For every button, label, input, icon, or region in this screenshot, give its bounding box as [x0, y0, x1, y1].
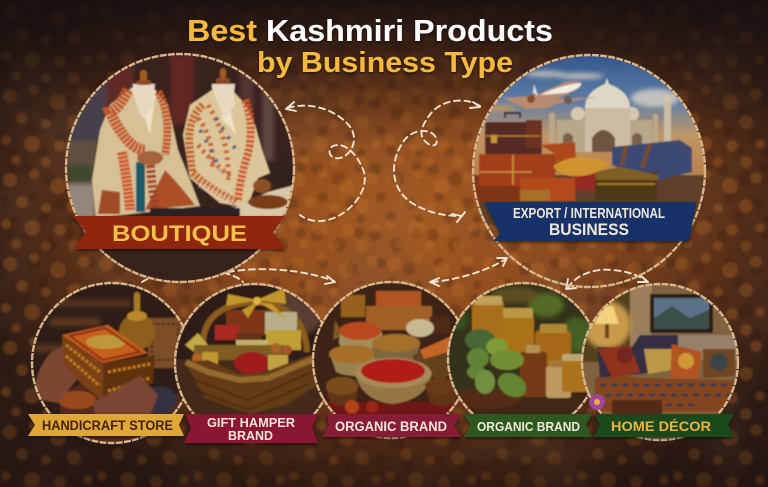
circle border — [313, 282, 469, 438]
arrow: centre connector — [430, 258, 507, 286]
ribbon: organic brand red: ORGANIC BRAND — [335, 419, 447, 434]
panel: organic brand spices — [312, 280, 460, 440]
circle border — [582, 284, 738, 440]
suitcases — [485, 122, 542, 155]
image: luggage and palace — [470, 50, 710, 225]
circle border — [175, 284, 333, 442]
title: Best Kashmiri Products — [187, 13, 553, 48]
circle border — [66, 54, 294, 282]
image: carved box — [34, 284, 184, 442]
image: sofa and cushions — [580, 282, 740, 442]
left shawl — [92, 88, 200, 218]
ribbon: gift hamper brand: GIFT HAMPER — [207, 415, 296, 430]
image: gift basket — [176, 285, 324, 414]
ribbon: export: EXPORT / INTERNATIONAL — [513, 205, 665, 222]
circle border — [473, 55, 705, 287]
image: shawls on mannequins — [67, 55, 293, 281]
arrow: right connector — [566, 270, 648, 289]
ribbon: handicraft store: HANDICRAFT STORE — [42, 418, 173, 433]
panel: boutique — [60, 50, 300, 290]
title: by Business Type — [257, 47, 513, 79]
ribbon: boutique — [73, 216, 285, 249]
right shawl — [183, 90, 270, 206]
ribbon: organic brand green: ORGANIC BRAND — [477, 419, 580, 434]
panel: handicraft store — [30, 280, 195, 445]
title — [187, 13, 553, 79]
image: bowls of spices — [314, 283, 459, 414]
icon: flower — [589, 394, 605, 410]
ribbon: gift hamper brand: BRAND — [228, 428, 273, 443]
plane — [503, 81, 597, 109]
ribbon: handicraft store — [28, 414, 184, 436]
table with dried fruit — [234, 184, 292, 216]
panel: gift hamper brand — [174, 282, 325, 444]
ribbon: gift hamper brand — [184, 414, 318, 443]
ribbon: boutique: BOUTIQUE — [112, 221, 247, 246]
image: honey jars and leaves — [449, 284, 590, 414]
Taj Mahal — [585, 78, 630, 108]
arrow: export loop — [394, 101, 480, 222]
panel: export — [470, 50, 710, 287]
ribbon: home decor — [593, 414, 734, 437]
arrow: lower left connector — [142, 269, 335, 284]
panel: home decor — [580, 282, 740, 442]
ribbon: home decor: HOME DÉCOR — [611, 418, 711, 434]
circle border — [32, 283, 192, 443]
floor — [470, 175, 710, 225]
ribbon: organic brand green — [463, 414, 592, 437]
ribbon: export — [485, 202, 696, 241]
arrow: boutique loop — [286, 102, 365, 221]
panel: organic brand honey — [446, 282, 592, 414]
ribbon: export: BUSINESS — [549, 220, 629, 239]
mannequin necks — [132, 84, 155, 118]
circle border — [448, 283, 598, 433]
ribbon: organic brand red — [322, 414, 461, 437]
